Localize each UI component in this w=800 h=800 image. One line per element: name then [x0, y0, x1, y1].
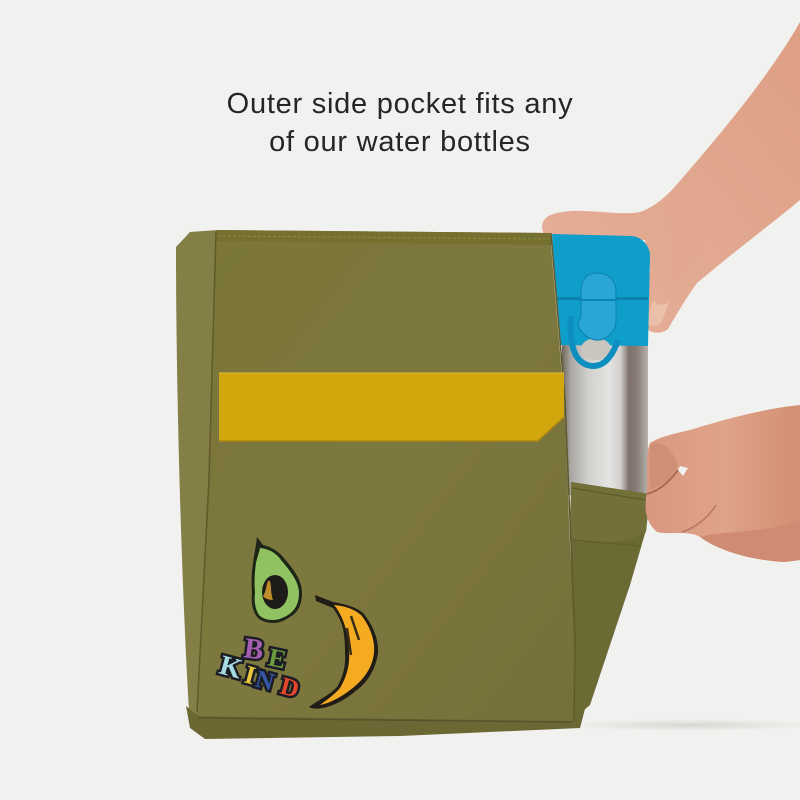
sticker: BE KIND: D — [277, 673, 302, 703]
lunch bag — [176, 230, 586, 739]
sticker: banana — [309, 595, 378, 709]
bottle: blue lid — [552, 234, 650, 346]
sticker: BE KIND: I — [241, 660, 259, 690]
floor shadow — [565, 719, 800, 731]
bag: folded top flap shading — [216, 230, 553, 245]
sticker: BE KIND — [216, 632, 302, 703]
sticker: BE KIND: N — [252, 666, 277, 696]
sticker: BE KIND: K — [216, 650, 245, 685]
bottle: steel body — [562, 345, 648, 495]
pocket fabric — [570, 482, 650, 722]
bag: seams — [197, 231, 216, 712]
bag: bottom edge — [186, 705, 586, 739]
sticker: BE KIND: B — [242, 632, 266, 667]
lower hand pulling the pocket — [646, 405, 800, 562]
upper hand gripping the bottle — [542, 22, 800, 333]
sticker: BE KIND: E — [266, 643, 289, 674]
bag: front panel — [196, 230, 574, 726]
bag: left side gusset — [176, 230, 218, 728]
sticker: avocado — [252, 537, 302, 623]
heading: Outer side pocket fits any — [227, 88, 573, 120]
velcro strap — [219, 373, 564, 441]
bag side panel with pocket — [570, 482, 650, 722]
water bottle — [552, 234, 650, 495]
bottle: clip and loop — [571, 273, 618, 366]
heading: of our water bottles — [269, 126, 531, 158]
